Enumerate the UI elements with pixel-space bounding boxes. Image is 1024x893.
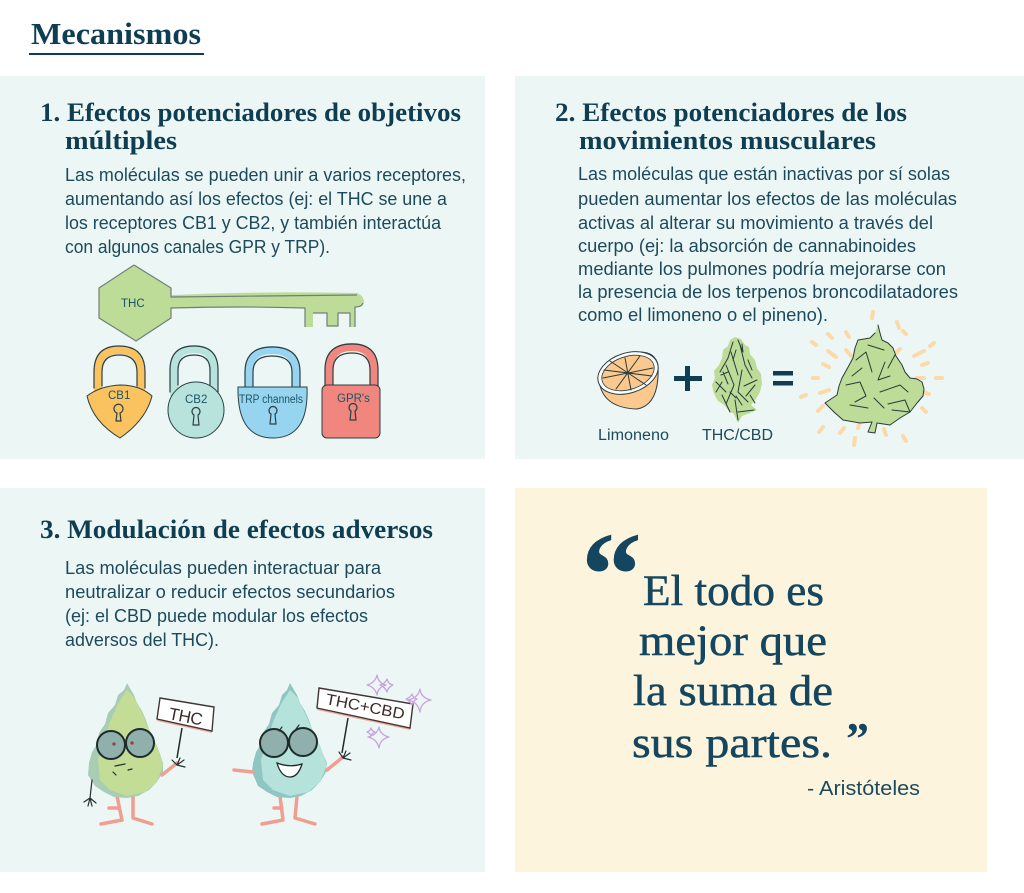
icon: CB2 lock: [168, 346, 224, 438]
text block: panel 2: [578, 163, 958, 325]
label: THC/CBD: THC/CBD: [702, 427, 773, 444]
heading: panel 1: 1. Efectos potenciadores de objetivos: [40, 98, 461, 127]
text block: panel 3: (ej: el CBD puede modular los efectos: [65, 605, 368, 626]
quote text: El todo es: [643, 568, 824, 615]
icon: GPR's lock: GPR's: [337, 393, 370, 405]
heading: panel 3: 3. Modulación de efectos adversos: [40, 515, 433, 544]
quote text: sus partes.: [632, 720, 832, 767]
icon: small cannabis bud: [712, 337, 762, 423]
text block: panel 3: Las moléculas pueden interactuar para: [65, 557, 382, 578]
text block: panel 1: con algunos canales GPR y TRP).: [65, 236, 330, 257]
heading: panel 2: movimientos musculares: [579, 126, 876, 155]
text block: panel 3: adversos del THC).: [65, 629, 219, 650]
text block: panel 3: neutralizar o reducir efectos secundarios: [65, 581, 395, 602]
text block: panel 2: mediante los pulmones podría mejorarse con: [578, 258, 946, 279]
icon: CB1 lock: CB1: [108, 390, 130, 402]
text block: panel 2: como el limoneno o el pineno).: [578, 304, 828, 325]
quote text: [632, 568, 833, 767]
quote text: mejor que: [639, 618, 827, 665]
icon: CB2 lock: CB2: [185, 394, 207, 406]
heading: panel 1: múltiples: [65, 126, 177, 155]
icon: THC key: [99, 265, 364, 341]
panel: modulación de efectos adversos: [0, 488, 485, 872]
icon: glowing rays: [801, 312, 942, 445]
heading: panel 2: 2. Efectos potenciadores de los: [555, 98, 907, 127]
icon: plus: [674, 366, 702, 391]
text block: panel 3: [65, 557, 395, 650]
character: THC bud: THC: [167, 704, 204, 729]
text block: panel 1: los receptores CB1 y CB2, y también interactúa: [65, 212, 442, 233]
heading: panel 1: [40, 98, 461, 155]
heading: panel 2: [555, 98, 907, 155]
text block: panel 2: activas al alterar su movimiento a través del: [578, 212, 933, 233]
icon: lemon: [592, 344, 664, 409]
label: Limoneno: Limoneno: [598, 427, 669, 444]
text block: panel 1: Las moléculas se pueden unir a varios receptores,: [65, 164, 466, 185]
icon: equals: [773, 371, 793, 386]
icon: TRP channels lock: TRP channels: [239, 394, 303, 406]
text block: panel 1: [65, 164, 466, 257]
icon: GPR's lock: [322, 344, 380, 438]
quote text: la suma de: [633, 668, 833, 715]
panel: quote: [515, 488, 987, 872]
text block: panel 2: la presencia de los terpenos broncodilatadores: [578, 281, 958, 302]
icon: CB1 lock: [87, 346, 152, 438]
character: THC bud: [84, 683, 214, 824]
icon: large glowing bud: [825, 325, 924, 433]
character: THC+CBD bud: THC+CBD: [324, 691, 406, 723]
text block: panel 2: cuerpo (ej: la absorción de cannabinoides: [578, 235, 916, 256]
text block: panel 2: pueden aumentar los efectos de las moléculas: [578, 188, 957, 209]
title: Mecanismos: [31, 16, 201, 51]
icon: opening quotation mark: “: [581, 508, 642, 643]
text block: panel 2: Las moléculas que están inactivas por sí solas: [578, 163, 950, 184]
icon: THC key: THC: [121, 298, 145, 310]
text block: panel 1: aumentando así los efectos (ej: el THC se une a: [65, 188, 448, 209]
panel: efectos de movimientos musculares: [515, 76, 1024, 459]
character: THC+CBD bud: [234, 683, 413, 824]
icon: TRP channels lock: [238, 347, 307, 438]
icon: closing quotation mark: ”: [846, 713, 869, 764]
panel: efectos de objetivos múltiples: [0, 76, 485, 459]
icon: sparkles: [367, 675, 431, 748]
attribution: - Aristóteles: [807, 777, 920, 800]
